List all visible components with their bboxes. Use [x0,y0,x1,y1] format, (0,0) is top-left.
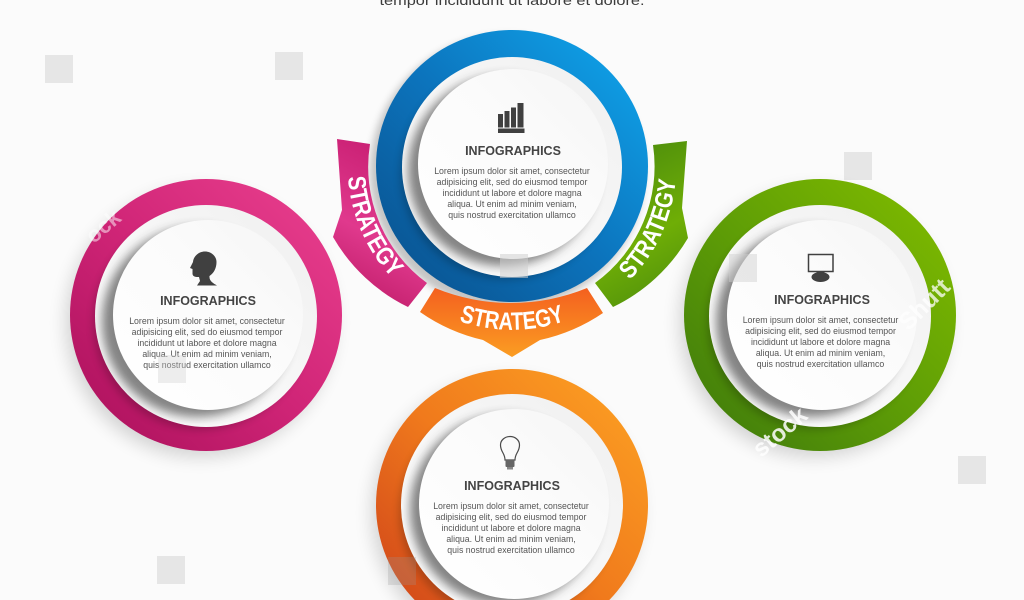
pink body text: quis nostrud exercitation ullamco [143,360,271,370]
panel: green circle [680,179,956,457]
arrow: orange strategy banner [420,288,603,357]
orange ring [376,369,648,600]
green body text: adipisicing elit, sed do eiusmod tempor [745,326,896,336]
orange heading: INFOGRAPHICS [464,479,560,493]
pink body text [129,316,285,370]
blue ring [376,30,648,302]
orange back disc [401,394,623,600]
blue front disc [418,69,608,259]
orange body text: quis nostrud exercitation ullamco [447,545,575,555]
green body text: quis nostrud exercitation ullamco [757,359,884,369]
panel: pink circle [66,179,342,457]
panel: orange circle [372,369,648,600]
panel: blue circle [370,30,648,309]
blue heading: INFOGRAPHICS [465,144,561,158]
green heading: INFOGRAPHICS [774,293,870,307]
arrow: pink strategy banner [333,139,427,307]
green body text [743,315,898,369]
green front disc [727,220,917,410]
green body text: Lorem ipsum dolor sit amet, consectetur [743,315,898,325]
watermark overlays [81,204,956,585]
pink front disc [113,220,303,410]
orange front disc [419,409,609,599]
arrow: pink strategy banner: STRATEGY [348,176,405,274]
blue back disc [402,57,622,277]
arrow: orange strategy banner: STRATEGY [460,304,560,330]
icon: light bulb [500,436,520,470]
pink heading: INFOGRAPHICS [160,294,256,308]
icon: head silhouette [190,252,217,286]
watermark overlays: Shutt [893,273,956,336]
green body text: incididunt ut labore et dolore magna [751,337,890,347]
green body text: aliqua. Ut enim ad minim veniam, [756,348,885,358]
arrow: green strategy banner [595,141,688,307]
arrow: green strategy banner: STRATEGY [620,178,676,278]
pink ring [70,179,342,451]
orange body text: adipisicing elit, sed do eiusmod tempor [436,512,586,522]
orange body text: Lorem ipsum dolor sit amet, consectetur [433,501,589,511]
blue body text: Lorem ipsum dolor sit amet, consectetur [434,166,590,176]
green back disc [709,205,931,427]
icon: monitor [808,254,833,282]
blue body text: aliqua. Ut enim ad minim veniam, [447,199,577,209]
blue body text: adipisicing elit, sed do eiusmod tempor [437,177,587,187]
green ring [684,179,956,451]
pink body text: Lorem ipsum dolor sit amet, consectetur [129,316,285,326]
pink body text: aliqua. Ut enim ad minim veniam, [142,349,272,359]
pink body text: adipisicing elit, sed do eiusmod tempor [132,327,282,337]
blue body text: quis nostrud exercitation ullamco [448,210,576,220]
watermark overlays: stock [747,401,813,463]
watermark overlays: ock [81,204,126,248]
orange body text: aliqua. Ut enim ad minim veniam, [446,534,576,544]
orange body text: incididunt ut labore et dolore magna [441,523,581,533]
orange body text [433,501,589,555]
pink back disc [95,205,317,427]
blue body text: incididunt ut labore et dolore magna [442,188,582,198]
blue body text [434,166,590,220]
icon: bar chart [498,103,524,133]
pink body text: incididunt ut labore et dolore magna [137,338,277,348]
